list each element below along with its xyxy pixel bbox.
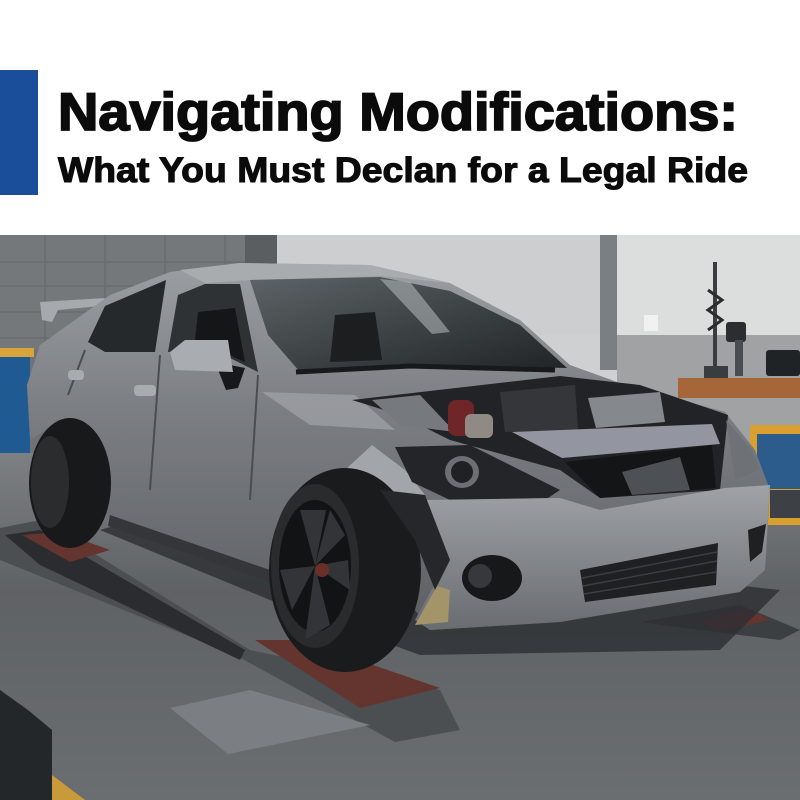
workbench with tools xyxy=(644,262,800,525)
title xyxy=(58,83,748,190)
headlight right xyxy=(726,420,760,480)
fender xyxy=(345,445,425,495)
front side window xyxy=(168,284,258,372)
car shadow xyxy=(100,500,780,655)
front grille xyxy=(580,543,718,602)
front bumper xyxy=(380,485,770,630)
front wheel xyxy=(269,468,421,672)
subtitle: What You Must Declan for a Legal Ride xyxy=(58,151,748,190)
windshield reflection xyxy=(380,279,450,334)
headlight left xyxy=(395,445,560,500)
wiper xyxy=(296,366,555,372)
rear wing xyxy=(40,298,105,322)
shoulder highlight xyxy=(262,392,395,430)
rear side window xyxy=(88,280,166,352)
fog light xyxy=(462,555,522,601)
accent bar xyxy=(0,70,38,195)
door lines xyxy=(68,350,258,500)
roof highlight xyxy=(180,263,450,283)
car body xyxy=(27,263,770,630)
title: Navigating Modifications: xyxy=(58,83,738,142)
floor lift platforms xyxy=(0,520,800,800)
door handles xyxy=(68,370,156,396)
seat and steering xyxy=(330,312,382,362)
rear wheel xyxy=(29,418,111,548)
engine bay xyxy=(352,376,728,498)
side skirt xyxy=(108,515,270,582)
windshield xyxy=(250,277,567,372)
side mirror xyxy=(170,340,245,390)
workshop background xyxy=(0,235,800,800)
seat in front window xyxy=(195,308,245,362)
broken trim xyxy=(415,586,450,625)
